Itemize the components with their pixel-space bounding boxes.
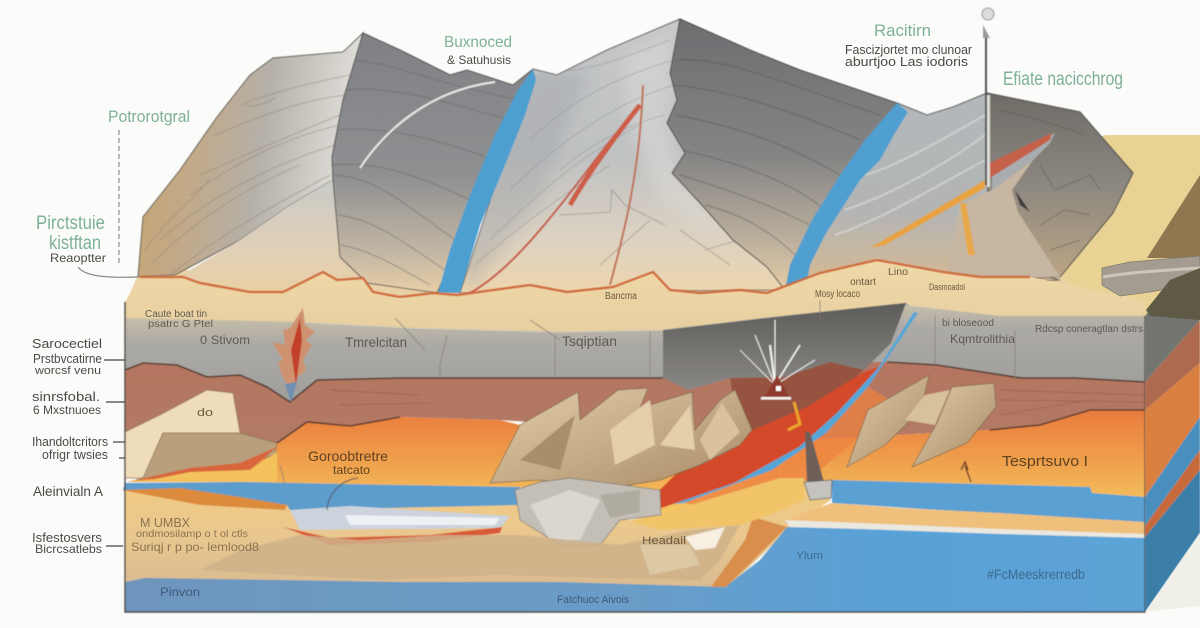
post base [804, 480, 832, 500]
label: top right [845, 21, 973, 69]
shoreline edge [711, 517, 787, 587]
label group five: Bicrcsatlebs [35, 542, 102, 556]
red contact line [140, 260, 1030, 297]
upper aquifer right [832, 480, 1145, 526]
label: far right heading: Efiate nacicchrog [1003, 69, 1123, 90]
red diagonal [630, 367, 879, 519]
yellow wedge [630, 478, 804, 530]
contact line gray-brown [125, 362, 1145, 402]
label group one: Prstbvcatirne [33, 351, 102, 366]
side: lower blue [1145, 470, 1200, 612]
inline labels orange layer: tatcato [333, 463, 370, 477]
brown wedge back [1147, 175, 1200, 258]
label: left heading block [36, 213, 106, 265]
lower blue water [125, 527, 1145, 612]
orange wedge [870, 180, 985, 248]
inline labels lower section: Headail [642, 535, 686, 547]
orange strip left [122, 488, 287, 510]
inline labels water: Fatchuoc Aivois [557, 594, 629, 606]
inline labels gray layer: bi bloseood [942, 318, 994, 329]
silver lens [283, 506, 510, 545]
mountain range [125, 8, 1133, 305]
label group three [32, 434, 108, 462]
inline labels sand band: Dasmoadol [929, 282, 965, 292]
inline labels sand band: Lino [888, 267, 908, 278]
leader ticks [104, 360, 125, 546]
ground shadow [1145, 533, 1200, 612]
white arc [360, 82, 495, 168]
stratum: gray [125, 318, 663, 402]
stratum: gray right [887, 305, 1145, 384]
red fault vein centre [470, 85, 643, 293]
label group two [32, 389, 101, 417]
maroon wedge under block [730, 362, 864, 440]
lower tan ground [125, 480, 831, 590]
inline labels gray layer: Caute boat tin [145, 309, 207, 320]
label: top right: aburtjoo Las iodoris [845, 54, 969, 69]
upper aquifer left [123, 482, 520, 510]
central boulders [490, 388, 752, 490]
white spark lines [740, 320, 815, 385]
fracture lines [280, 300, 1145, 484]
pointer lens [327, 478, 358, 510]
left boulder [125, 390, 277, 480]
side: gray [1145, 250, 1200, 382]
orange beside diagonal [684, 387, 890, 510]
inline labels orange layer: Goroobtretre [308, 448, 388, 464]
label group one [32, 336, 102, 377]
mountain base backing [125, 270, 1080, 305]
inline labels sand band: do [197, 407, 213, 419]
leader: curved [78, 267, 138, 277]
blue fault band right [785, 103, 908, 293]
mountain facet: central light slope [450, 19, 785, 293]
side: orange [1145, 363, 1200, 497]
mountain facet: left foot [175, 180, 367, 290]
inline labels water [160, 550, 1085, 606]
leader: dashed vertical [118, 130, 120, 263]
inline labels water: Ylum [796, 550, 823, 562]
label group three: ofrigr twsies [42, 447, 108, 462]
inline labels sand band: ontart [850, 277, 876, 288]
inline labels gray layer: Tmrelcitan [345, 334, 407, 350]
mountain facet: right light slope [808, 92, 1060, 282]
label group two: 6 Mxstnuoes [33, 403, 101, 417]
label group three: Ihandoltcritors [32, 434, 108, 449]
mountain facet: left tan slope [138, 33, 363, 277]
side dark corner [1146, 268, 1200, 320]
label group two: sinrsfobal. [32, 389, 100, 404]
arrow up in orange [961, 462, 971, 482]
red wedge [990, 133, 1052, 178]
inline labels sand band [197, 267, 965, 419]
side: brown [1145, 320, 1200, 410]
label group four: Aleinvialn A [33, 483, 104, 499]
orange spike [960, 203, 975, 255]
inline labels orange layer [308, 448, 1088, 477]
survey mast [982, 8, 994, 187]
inline labels lower section: M UMBX [140, 515, 190, 530]
side: blue [1145, 417, 1200, 526]
gray backing [663, 303, 920, 402]
grey ledge under wedge [992, 133, 1055, 190]
right boulders [847, 375, 996, 467]
label: left heading block: Pirctstuie [36, 213, 105, 234]
sand and orange strip right [785, 503, 1145, 537]
inline labels gray layer: 0 Stivom [200, 333, 250, 347]
inline labels lower section: Suriqj r p po- lemlood8 [131, 540, 259, 554]
dark gray fault block [663, 303, 906, 390]
blue fault band left [438, 69, 536, 293]
back sand plane [1000, 135, 1200, 320]
lit rock facet [945, 160, 1060, 280]
inline labels gray layer: psatrc G Ptel [148, 319, 213, 330]
inline labels sand band: Bancma [605, 291, 637, 302]
label: top centre: & Satuhusis [447, 53, 511, 67]
inline strata labels [131, 267, 1143, 606]
inline labels gray layer [145, 309, 1143, 350]
side face [1145, 250, 1200, 612]
layered rock [1102, 256, 1200, 296]
inline labels gray layer: Tsqiptian [562, 333, 617, 349]
inline labels gray layer: Rdcsp coneragtlan dstrs [1035, 324, 1143, 335]
label group one: worcsf venu [34, 365, 101, 377]
lower rock mass [200, 525, 740, 580]
mountain facet: dark face two [332, 33, 533, 293]
inline labels water: Pinvon [160, 585, 200, 599]
label: top right: Fascizjortet mo clunoar [845, 42, 973, 57]
inline labels gray layer: Kqmtrolithia [950, 332, 1015, 346]
sand surface band [125, 260, 1145, 332]
stratum: red brown [125, 362, 1145, 443]
inline labels water: #FcMeeskrerredb [987, 566, 1085, 582]
inline labels orange layer: Tesprtsuvo I [1002, 453, 1088, 470]
label: top centre: Buxnoced [444, 34, 512, 51]
hazard marker [761, 375, 800, 430]
label: top centre [444, 34, 512, 67]
mountain facet: right dark block [945, 93, 1133, 280]
post [805, 432, 824, 482]
side: orange strip [1145, 450, 1200, 537]
label group one: Sarocectiel [32, 336, 102, 351]
red feather fault [272, 308, 315, 402]
label: top right: Racitirn [874, 21, 931, 40]
stratum: orange [127, 410, 1145, 515]
inline labels sand band: Mosy locaco [815, 289, 860, 300]
inline labels lower section: ondmosilamp o t ol ctls [136, 529, 248, 540]
block frame [125, 302, 1145, 612]
label group five: Isfestosvers [32, 530, 102, 545]
gray rock pile [515, 478, 661, 545]
label: left heading block: Reaoptter [50, 251, 106, 265]
left strata labels [32, 336, 108, 556]
mountain facet: dark face three [667, 19, 897, 290]
contact line brown-orange [277, 410, 1145, 443]
front face strata [122, 300, 1145, 612]
label: left heading block: kistftan [49, 233, 101, 254]
label: top left heading: Potrorotgral [108, 107, 190, 126]
yellow fill under boulder [145, 452, 277, 482]
label group five [32, 530, 102, 556]
blue diagonal band [673, 312, 918, 504]
inline labels lower section [131, 515, 686, 554]
white stripe [785, 520, 1145, 538]
